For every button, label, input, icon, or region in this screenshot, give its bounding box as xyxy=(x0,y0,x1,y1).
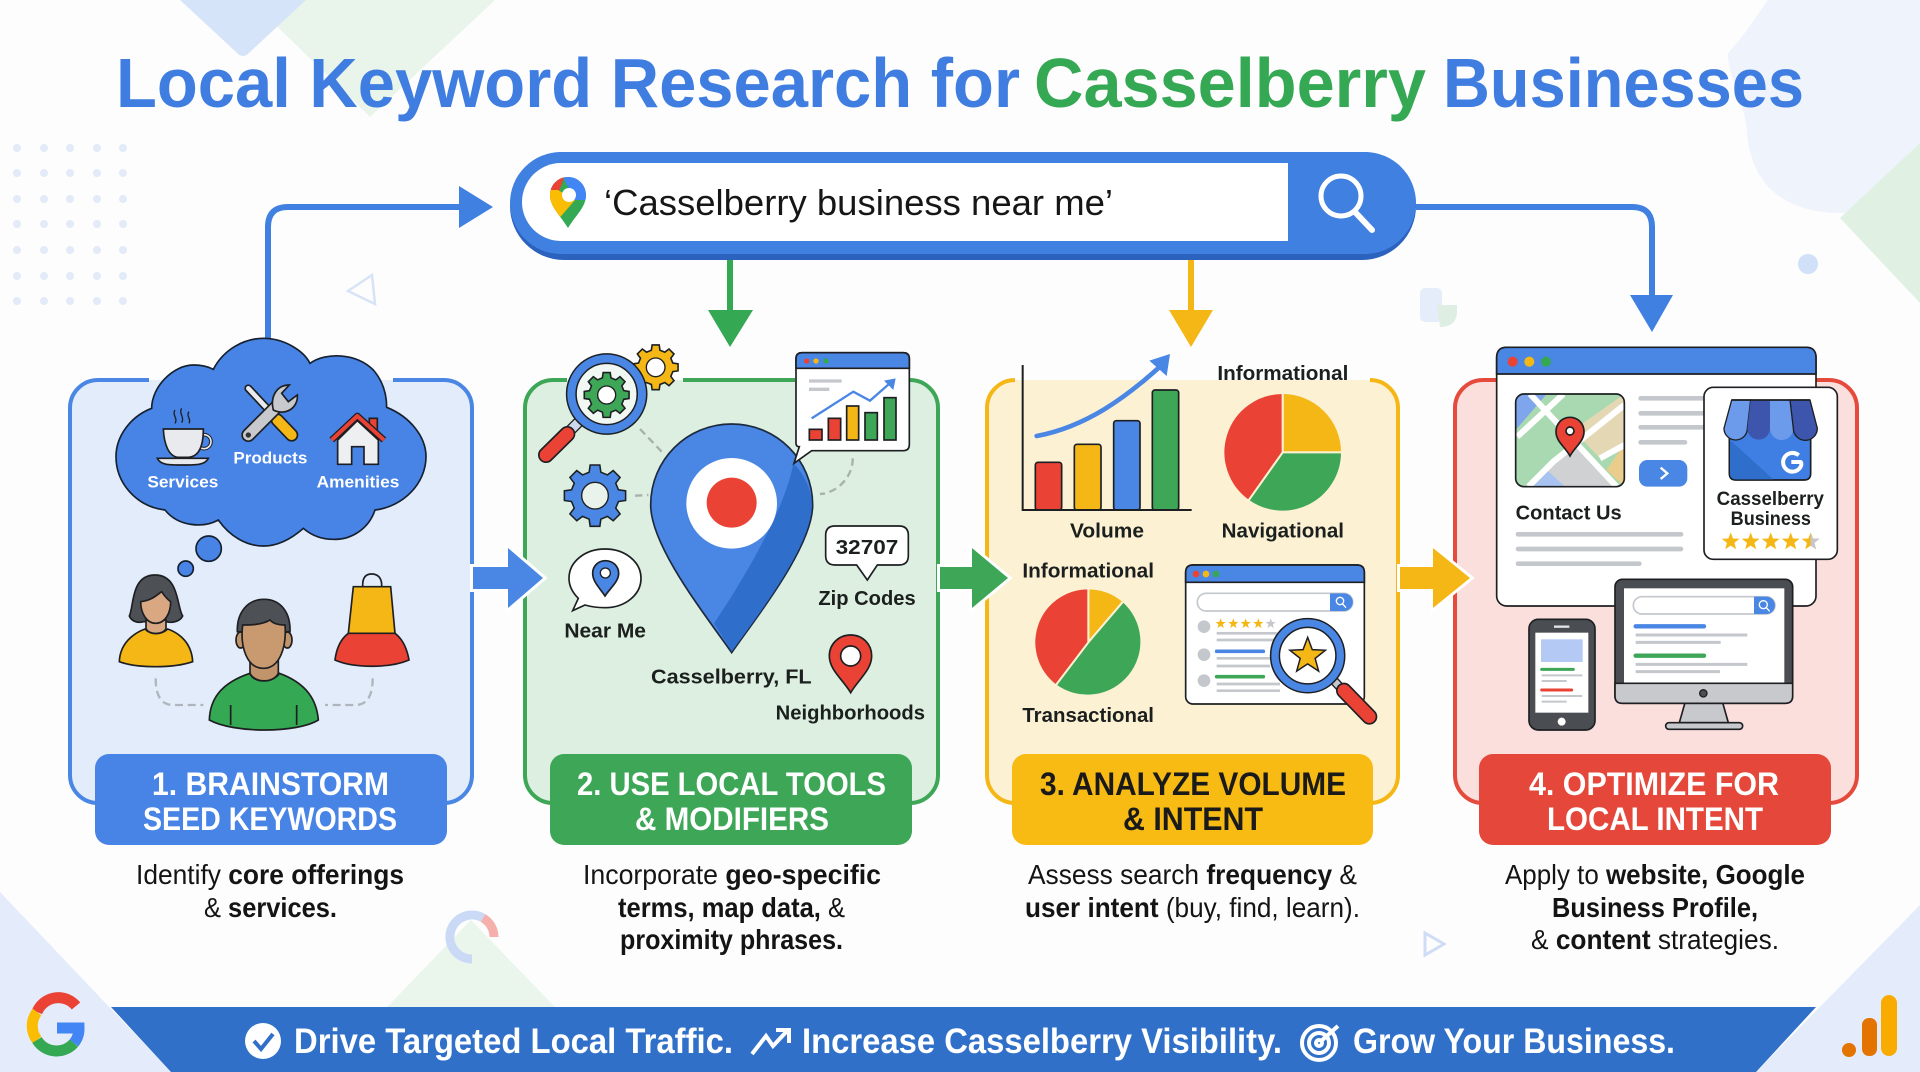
badge 2 xyxy=(550,754,912,845)
thought bubbles xyxy=(178,536,221,576)
description 1: Identify core offerings xyxy=(136,859,404,890)
dashed connectors xyxy=(156,678,373,705)
label: Casselberry, FL: Casselberry, FL xyxy=(651,666,812,688)
label: near me: Near Me xyxy=(564,620,646,642)
description 2: proximity phrases. xyxy=(620,924,843,955)
icon: blue gear xyxy=(564,465,626,526)
search query text: ‘Casselberry business near me’ xyxy=(604,182,1113,223)
description 2: Incorporate geo-specific xyxy=(583,859,881,890)
footer banner xyxy=(111,1007,1816,1072)
icon: trend arrow xyxy=(752,1030,789,1054)
badge 2: & MODIFIERS xyxy=(635,801,829,837)
icon: chart popup xyxy=(794,353,909,463)
icon: zip code bubble xyxy=(826,526,908,580)
dashed connectors xyxy=(635,429,853,496)
icon: analytics bars xyxy=(1842,995,1897,1057)
description 4 xyxy=(1505,859,1805,955)
star rating xyxy=(1722,532,1820,549)
icon: target xyxy=(1302,1026,1338,1060)
badge 1 xyxy=(95,754,447,845)
bar chart: volume xyxy=(1023,354,1192,510)
icon: magnifier with gear xyxy=(546,359,642,455)
label: neighborhoods: Neighborhoods xyxy=(776,702,925,724)
badge 3: & INTENT xyxy=(1123,801,1263,837)
google business card xyxy=(1704,387,1837,559)
icon: yellow gear xyxy=(633,345,678,390)
icon: house xyxy=(332,416,384,464)
button xyxy=(1639,460,1687,487)
icon: check xyxy=(245,1023,281,1059)
icon: google g logo xyxy=(32,998,79,1051)
description 3: Assess search frequency & xyxy=(1028,859,1357,890)
icon: smartphone xyxy=(1529,619,1595,730)
panel 4: optimize xyxy=(1455,347,1857,803)
label: navigational: Navigational xyxy=(1222,520,1344,542)
badge 1: SEED KEYWORDS xyxy=(143,801,397,837)
cloud labels: Products xyxy=(233,448,307,467)
icon: zip code bubble: 32707 xyxy=(836,536,898,559)
description 3: user intent (buy, find, learn). xyxy=(1025,892,1360,923)
title: Local Keyword Research for xyxy=(116,44,1020,122)
illustration: charts xyxy=(1022,354,1369,727)
badge 1: 1. BRAINSTORM xyxy=(152,766,389,802)
badge 4: 4. OPTIMIZE FOR xyxy=(1529,766,1779,802)
thought cloud xyxy=(116,338,426,546)
badge 3 xyxy=(1012,754,1373,845)
illustration: website and devices xyxy=(1497,347,1837,730)
icon: woman xyxy=(119,575,193,667)
illustration: pin and tools xyxy=(546,345,925,724)
icon: maps pin xyxy=(550,177,586,228)
icon: desktop monitor xyxy=(1615,579,1793,729)
footer text 2: Increase Casselberry Visibility. xyxy=(802,1022,1282,1061)
icon: browser results with magnifier xyxy=(1186,565,1369,717)
description 1 xyxy=(136,859,404,923)
label: informational bottom: Informational xyxy=(1022,560,1154,582)
pie chart 2 xyxy=(1034,588,1141,696)
description 4: Apply to website, Google xyxy=(1505,859,1805,890)
badge 4 xyxy=(1479,754,1831,845)
google business card: Business xyxy=(1731,509,1811,530)
title: Businesses xyxy=(1443,44,1804,122)
icon: coffee cup xyxy=(157,408,211,465)
illustration: cloud and people xyxy=(116,338,426,730)
pie chart 1 xyxy=(1223,393,1342,512)
footer text 1: Drive Targeted Local Traffic. xyxy=(294,1022,733,1061)
label: volume: Volume xyxy=(1070,520,1144,542)
icon: near me bubble xyxy=(569,549,641,611)
arrow: step 1 to 2 xyxy=(473,548,543,608)
cloud labels: Amenities xyxy=(317,473,399,492)
footer text 3: Grow Your Business. xyxy=(1353,1022,1675,1061)
panel 2: local tools xyxy=(525,345,938,803)
icon: tools xyxy=(246,385,297,438)
panel 3: analyze xyxy=(987,354,1398,803)
cloud labels: Services xyxy=(147,473,218,492)
title: Casselberry xyxy=(1034,44,1426,122)
description 4: & content strategies. xyxy=(1531,924,1779,955)
search bar xyxy=(510,152,1416,260)
map thumbnail xyxy=(1516,394,1624,487)
icon: red pin xyxy=(829,635,872,693)
icon: storefront xyxy=(1724,400,1817,480)
arrow: step 2 to 3 xyxy=(940,548,1008,608)
website browser window xyxy=(1497,347,1816,606)
badge 4: LOCAL INTENT xyxy=(1547,801,1763,837)
badge 2: 2. USE LOCAL TOOLS xyxy=(577,766,886,802)
cloud labels xyxy=(147,448,399,492)
business name: Casselberry xyxy=(1717,489,1824,510)
badge 3: 3. ANALYZE VOLUME xyxy=(1040,766,1346,802)
connector arrows from search bar xyxy=(268,186,1673,347)
panel 1: brainstorm xyxy=(70,338,472,803)
label: transactional: Transactional xyxy=(1022,705,1154,727)
title xyxy=(116,44,1804,122)
icon: central location pin xyxy=(651,424,813,653)
icon: shopping bag xyxy=(335,574,409,666)
description 4: Business Profile, xyxy=(1552,892,1758,923)
description 2 xyxy=(583,859,881,955)
description 3 xyxy=(1025,859,1360,923)
label: contact us: Contact Us xyxy=(1516,502,1622,524)
icon: magnifier xyxy=(1321,176,1372,230)
description 2: terms, map data, & xyxy=(618,892,845,923)
label: zip codes: Zip Codes xyxy=(818,588,916,610)
arrow: step 3 to 4 xyxy=(1400,548,1470,608)
icon: man xyxy=(209,599,318,730)
description 1: & services. xyxy=(204,892,337,923)
label: informational top: Informational xyxy=(1217,363,1348,385)
